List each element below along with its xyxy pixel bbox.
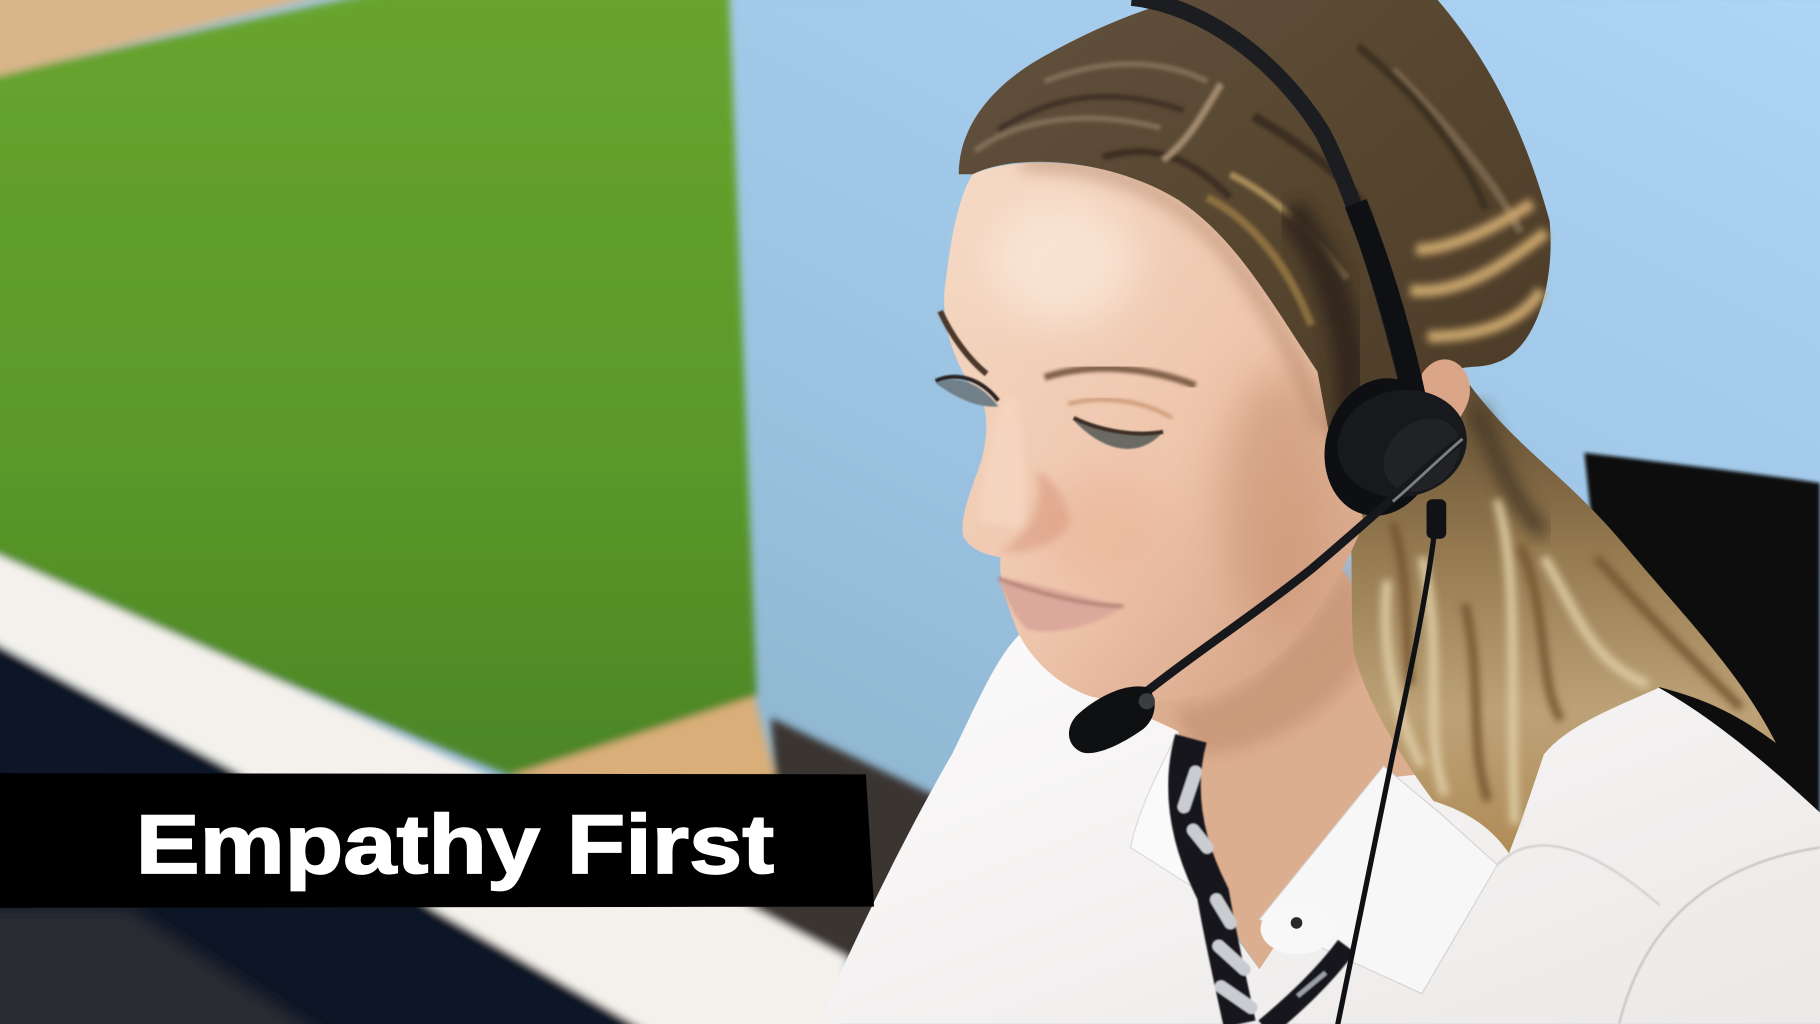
monitor vent grille (0, 908, 337, 1024)
white monitor edge (0, 546, 847, 1024)
blurred office background (0, 0, 946, 1024)
jaw shadow (1172, 557, 1370, 755)
office chair (1584, 453, 1820, 836)
left eye (936, 377, 998, 407)
nose tip and nostril (1001, 470, 1070, 553)
green partition (0, 0, 757, 775)
hair strands (975, 47, 1521, 325)
eyelid fold (1068, 400, 1172, 418)
black title bar (0, 773, 874, 908)
hair back: blonde lengths (1335, 383, 1776, 853)
mic boom (1143, 439, 1462, 694)
hair top (959, 0, 1551, 464)
nose highlight (981, 395, 1025, 528)
left collar (1131, 734, 1207, 896)
right eyebrow (1045, 368, 1196, 385)
left eyebrow (940, 311, 987, 374)
hairline shadow (1021, 163, 1323, 430)
shirt (818, 633, 1820, 1024)
dark monitor body (0, 634, 671, 1024)
headset (1069, 0, 1475, 1024)
mic boom hinge (1393, 439, 1462, 502)
dark floor (650, 717, 946, 975)
shirt sleeve seam (1619, 847, 1820, 1024)
agent figure (818, 0, 1820, 1024)
banner (0, 773, 874, 908)
title text: Empathy First (136, 797, 774, 891)
cable clip (1427, 499, 1446, 539)
right eye (1074, 418, 1163, 449)
ear (1422, 359, 1470, 418)
shirt button (1261, 903, 1335, 954)
cheek shading (1225, 372, 1329, 627)
cable (1337, 511, 1437, 1024)
right collar (1259, 766, 1497, 994)
headband slider (1356, 203, 1414, 395)
ear cup (1309, 365, 1475, 529)
tan partition base (511, 697, 775, 801)
cheek colour (1045, 476, 1161, 580)
neck (1079, 557, 1439, 969)
mic foam (1069, 686, 1155, 753)
headband (1132, 0, 1407, 383)
blonde highlight band (1410, 203, 1546, 337)
hair parting (1163, 84, 1221, 160)
necklace (1184, 738, 1346, 1024)
face (936, 163, 1364, 702)
dark hair shadow (1288, 209, 1353, 441)
forehead highlight (987, 197, 1138, 325)
tan partition top edge (0, 0, 400, 79)
lips (998, 578, 1124, 632)
